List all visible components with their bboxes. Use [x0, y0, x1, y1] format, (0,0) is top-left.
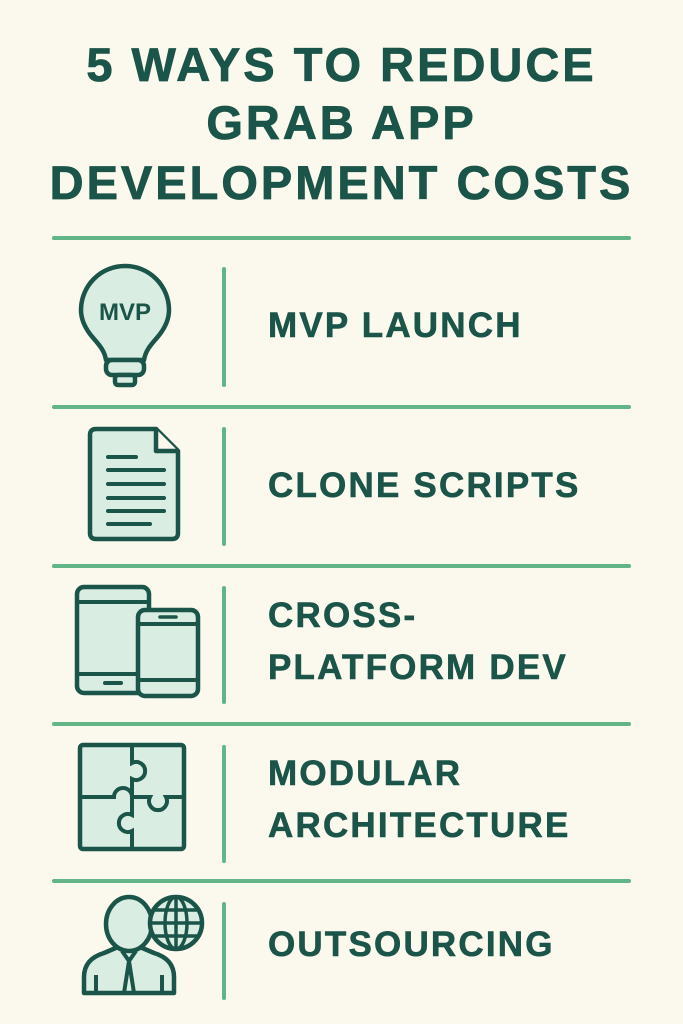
label: outsourcing: OUTSOURCING	[268, 925, 555, 964]
icon: puzzle	[78, 742, 186, 852]
label: modular architecture: ARCHITECTURE	[268, 806, 571, 845]
title: DEVELOPMENT COSTS	[50, 156, 633, 209]
icon: lightbulb MVP	[78, 264, 172, 388]
icon: person with globe	[82, 894, 204, 996]
icon: devices	[74, 584, 200, 698]
label: cross-platform dev: PLATFORM DEV	[268, 648, 568, 687]
title: GRAB APP	[206, 96, 477, 149]
icon: document	[88, 426, 180, 542]
title: 5 WAYS TO REDUCE	[86, 38, 597, 91]
label: modular architecture: MODULAR	[268, 754, 462, 793]
icon: lightbulb MVP: MVP	[99, 299, 151, 326]
label: cross-platform dev: CROSS-	[268, 596, 417, 635]
label: modular architecture	[268, 754, 571, 845]
title	[50, 38, 633, 209]
label: MVP launch: MVP LAUNCH	[268, 306, 523, 345]
label: clone scripts: CLONE SCRIPTS	[268, 466, 581, 505]
label: cross-platform dev	[268, 596, 568, 687]
